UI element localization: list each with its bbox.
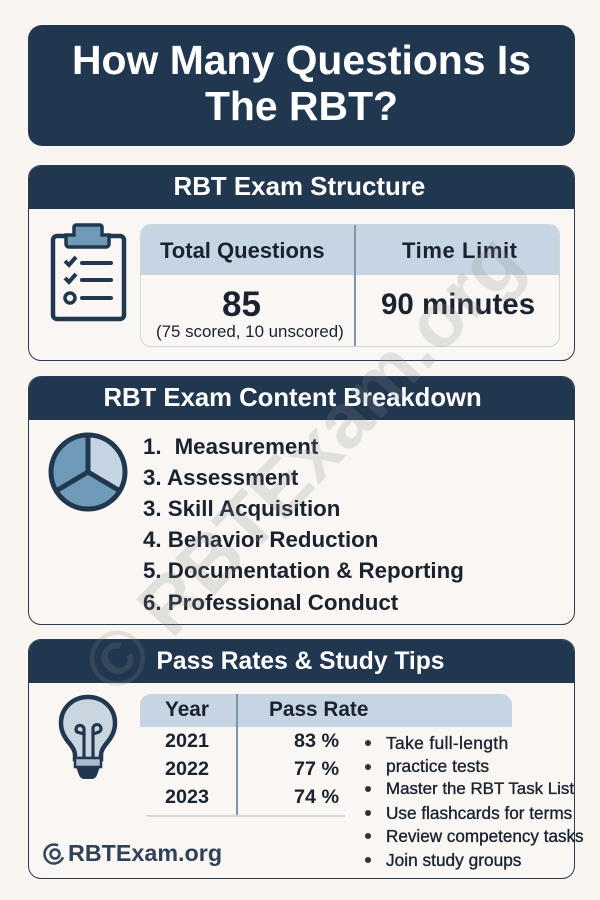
label: total questions: Total Questions <box>160 238 325 263</box>
row 2022: 2022 <box>165 758 209 780</box>
pass rate table <box>140 694 512 817</box>
item 1: 1. Measurement <box>143 434 318 459</box>
study tips list <box>386 733 584 870</box>
item 5: 5. Documentation & Reporting <box>143 558 464 583</box>
note: scored split: (75 scored, 10 unscored) <box>156 322 344 341</box>
label: time limit: Time Limit <box>402 238 518 263</box>
column label: year: Year <box>165 698 209 721</box>
column divider <box>236 694 238 817</box>
rate 2021: 83 % <box>294 730 339 752</box>
item 2: 3. Assessment <box>143 465 298 490</box>
heading: pass rates and study tips: Pass Rates & Study Tips <box>156 648 444 675</box>
tip 5: Join study groups <box>386 850 521 870</box>
icon: pie chart <box>48 432 128 512</box>
tip 1: Take full-length <box>386 733 509 753</box>
row 2021: 2021 <box>165 730 209 752</box>
tip 1 continued: practice tests <box>386 756 489 776</box>
tip 3: Use flashcards for terms <box>386 803 572 823</box>
bottom rule <box>140 815 345 817</box>
value: 90 minutes: 90 minutes <box>381 288 535 321</box>
watermark: © RBTExam.org <box>66 217 538 709</box>
title banner: How Many Questions Is <box>72 37 531 83</box>
item 6: 6. Professional Conduct <box>143 590 398 615</box>
title banner <box>28 25 575 146</box>
row 2023: 2023 <box>165 786 209 808</box>
rate 2022: 77 % <box>294 758 339 780</box>
icon: clipboard <box>50 223 126 322</box>
item 4: 4. Behavior Reduction <box>143 527 378 552</box>
title banner: The RBT? <box>205 83 398 129</box>
tip 4: Review competency tasks <box>386 827 584 846</box>
panel: exam structure <box>28 165 575 361</box>
column label: pass rate: Pass Rate <box>269 698 368 721</box>
item 3: 3. Skill Acquisition <box>143 496 340 521</box>
heading: exam structure: RBT Exam Structure <box>174 173 425 201</box>
table header band <box>141 225 559 275</box>
panel: content breakdown <box>28 376 575 625</box>
heading: content breakdown: RBT Exam Content Breakdown <box>104 384 482 412</box>
heading: exam structure <box>29 166 574 209</box>
icon: light bulb <box>58 694 118 779</box>
rate 2023: 74 % <box>294 786 339 808</box>
heading: content breakdown <box>29 377 574 420</box>
table header band <box>140 694 512 727</box>
heading: pass rates and study tips <box>29 640 574 683</box>
exam structure table <box>140 224 560 347</box>
value: 85: 85 <box>222 285 261 324</box>
column divider <box>354 225 356 346</box>
logo mark <box>43 843 64 865</box>
tip 2: Master the RBT Task List <box>386 779 574 798</box>
content list <box>143 434 464 615</box>
panel: pass rates and study tips <box>28 639 575 879</box>
logo text: RBTExam.org <box>68 840 222 866</box>
logo: RBTExam.org <box>43 840 222 866</box>
